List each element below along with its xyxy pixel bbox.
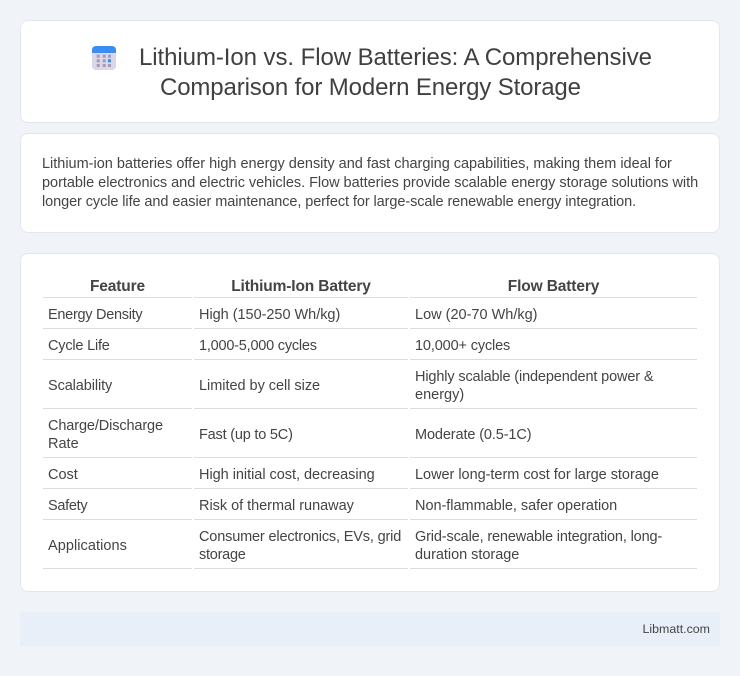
intro paragraph: Lithium-ion batteries offer high energy density and fast charging capabilities, making them ideal for — [42, 156, 672, 172]
footer bar — [20, 612, 720, 646]
intro paragraph: longer cycle life and easier maintenance, perfect for large-scale renewable energy integration. — [42, 194, 636, 210]
row: cost — [43, 467, 697, 489]
row: energy density: High (150-250 Wh/kg) — [199, 307, 340, 323]
title — [139, 44, 652, 101]
row: safety — [43, 498, 697, 520]
table header row: Flow Battery — [508, 278, 599, 295]
row: safety: Risk of thermal runaway — [199, 498, 354, 514]
row: safety: Non-flammable, safer operation — [415, 498, 617, 514]
title: Lithium-Ion vs. Flow Batteries: A Comprehensive — [139, 44, 652, 71]
row: cycle life: 10,000+ cycles — [415, 338, 510, 354]
row: charge/discharge rate: Charge/Discharge — [48, 418, 163, 434]
row: applications: storage — [199, 547, 246, 563]
table header row — [43, 278, 697, 298]
comparison table panel — [20, 253, 720, 592]
row: charge/discharge rate: Rate — [48, 436, 79, 452]
row: cycle life: Cycle Life — [48, 338, 110, 354]
row: applications: Consumer electronics, EVs, grid — [199, 529, 401, 545]
icon: calendar — [92, 46, 116, 70]
row: scalability: Highly scalable (independent power & — [415, 369, 653, 385]
intro paragraph: portable electronics and electric vehicles. Flow batteries provide scalable energy storage solutions with — [42, 175, 698, 191]
row: charge/discharge rate: Fast (up to 5C) — [199, 427, 293, 443]
row: charge/discharge rate: Moderate (0.5-1C) — [415, 427, 531, 443]
row: cycle life — [43, 338, 697, 360]
title: Comparison for Modern Energy Storage — [160, 74, 581, 101]
comparison table — [43, 278, 697, 569]
row: scalability: energy) — [415, 387, 464, 403]
row: energy density: Low (20-70 Wh/kg) — [415, 307, 538, 323]
row: applications: duration storage — [415, 547, 519, 563]
row: scalability: Scalability — [48, 378, 112, 394]
row: applications: Grid-scale, renewable integration, long- — [415, 529, 662, 545]
intro text panel — [20, 133, 720, 233]
row: applications — [43, 529, 697, 569]
table header row: Feature — [90, 278, 145, 295]
footer text: Libmatt.com — [643, 622, 710, 636]
row: safety: Safety — [48, 498, 87, 514]
row: cycle life: 1,000-5,000 cycles — [199, 338, 317, 354]
row: scalability: Limited by cell size — [199, 378, 320, 394]
row: energy density — [43, 307, 697, 329]
row: charge/discharge rate — [43, 418, 697, 458]
row: cost: Cost — [48, 467, 78, 483]
row: cost: Lower long-term cost for large storage — [415, 467, 659, 483]
row: cost: High initial cost, decreasing — [199, 467, 375, 483]
row: scalability — [43, 369, 697, 409]
row: applications: Applications — [48, 538, 127, 554]
table header row: Lithium-Ion Battery — [231, 278, 371, 295]
row: energy density: Energy Density — [48, 307, 142, 323]
intro paragraph — [42, 156, 698, 210]
header panel — [20, 20, 720, 123]
